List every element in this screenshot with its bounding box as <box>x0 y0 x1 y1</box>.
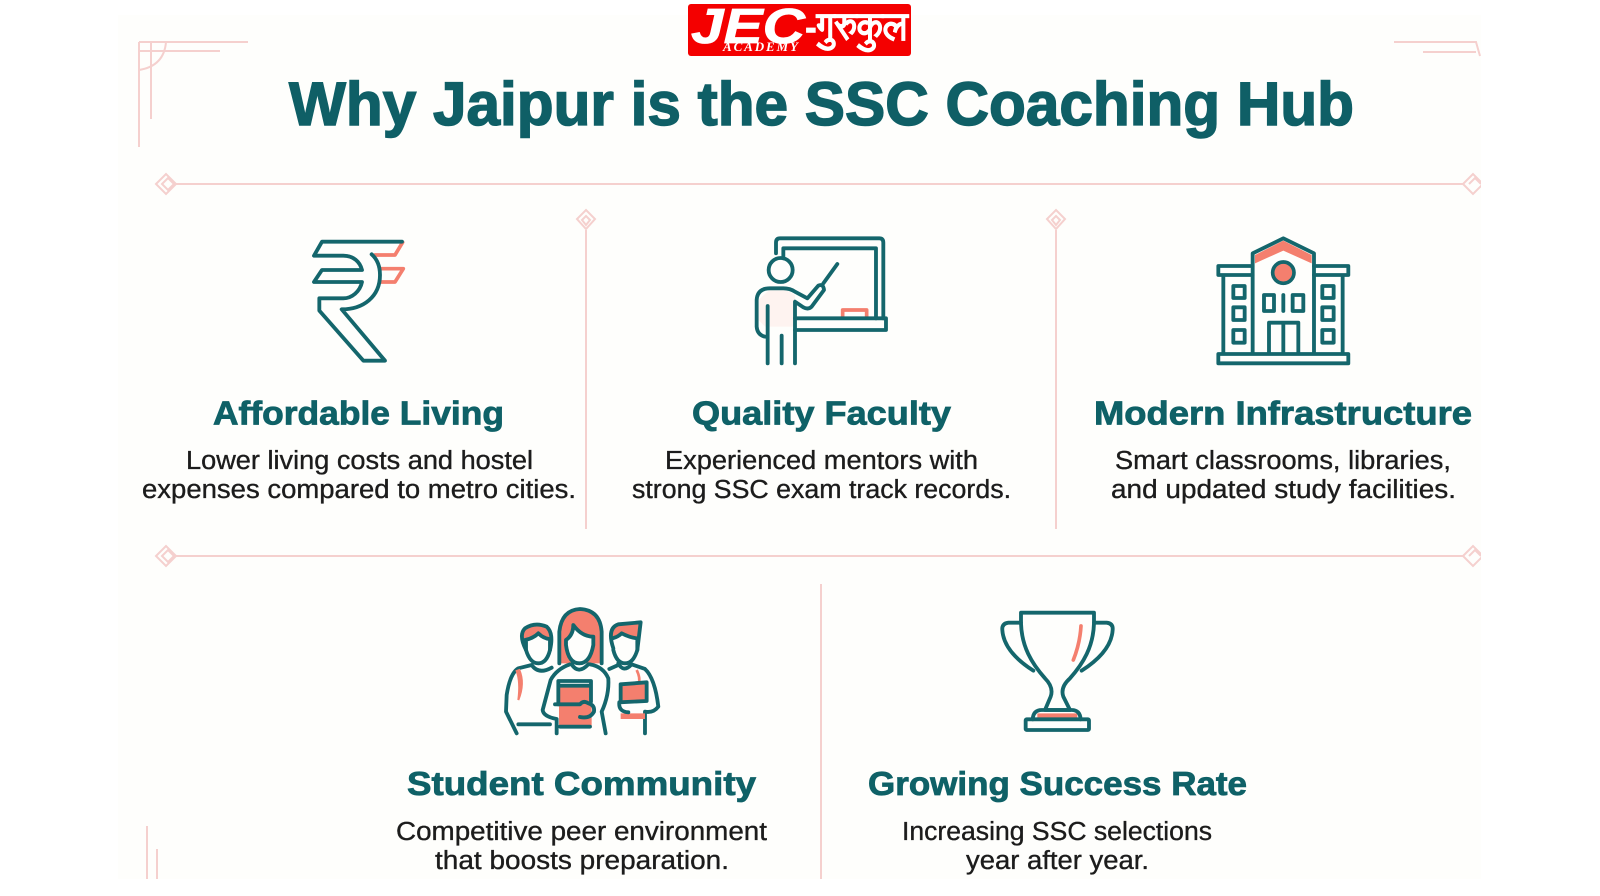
description: Experienced mentors with <box>665 447 978 475</box>
logo: -गुरुकुल <box>805 7 910 52</box>
description: Smart classrooms, libraries, <box>1115 447 1451 475</box>
icon: rupee <box>314 242 403 361</box>
divider: vertical between columns 1 and 2 <box>577 210 595 529</box>
right student <box>610 622 641 640</box>
icon: students <box>506 609 658 733</box>
panel: quality faculty: strong SSC exam track records. <box>632 476 1011 504</box>
heading: Student Community <box>407 765 757 802</box>
logo <box>688 0 911 56</box>
corner ornament: top left <box>139 42 248 147</box>
panel: growing success rate <box>868 613 1247 875</box>
heading: Quality Faculty <box>692 394 952 432</box>
title: Why Jaipur is the SSC Coaching Hub <box>289 70 1354 138</box>
description: Increasing SSC selections <box>902 818 1212 846</box>
divider: lower horizontal <box>156 546 1483 566</box>
heading: Growing Success Rate <box>868 765 1247 802</box>
divider: vertical lower row <box>820 584 822 879</box>
divider: upper horizontal <box>156 174 1483 194</box>
icon: building <box>1218 238 1348 363</box>
logo: ACADEMY <box>722 39 799 54</box>
left student <box>522 625 551 640</box>
icon: trophy <box>1002 613 1113 730</box>
panel: modern infrastructure <box>1094 238 1472 504</box>
description: Lower living costs and hostel <box>186 447 533 475</box>
heading: Modern Infrastructure <box>1094 394 1472 432</box>
panel: quality faculty <box>632 238 1011 504</box>
panel: affordable living: expenses compared to metro cities. <box>142 476 576 504</box>
panel: student community <box>396 609 767 875</box>
corner ornament: top right <box>1394 42 1480 56</box>
panel: student community: that boosts preparation. <box>435 847 729 875</box>
icon: teacher at board <box>757 238 886 363</box>
panel: modern infrastructure: and updated study facilities. <box>1111 476 1456 504</box>
logo: JEC <box>691 0 806 54</box>
corner ornament: bottom left <box>147 826 157 879</box>
description: Competitive peer environment <box>396 818 767 846</box>
centre student <box>559 609 602 663</box>
divider: vertical between columns 2 and 3 <box>1047 210 1065 529</box>
heading: Affordable Living <box>213 394 504 432</box>
panel: affordable living <box>142 242 576 504</box>
panel: growing success rate: year after year. <box>966 847 1149 875</box>
